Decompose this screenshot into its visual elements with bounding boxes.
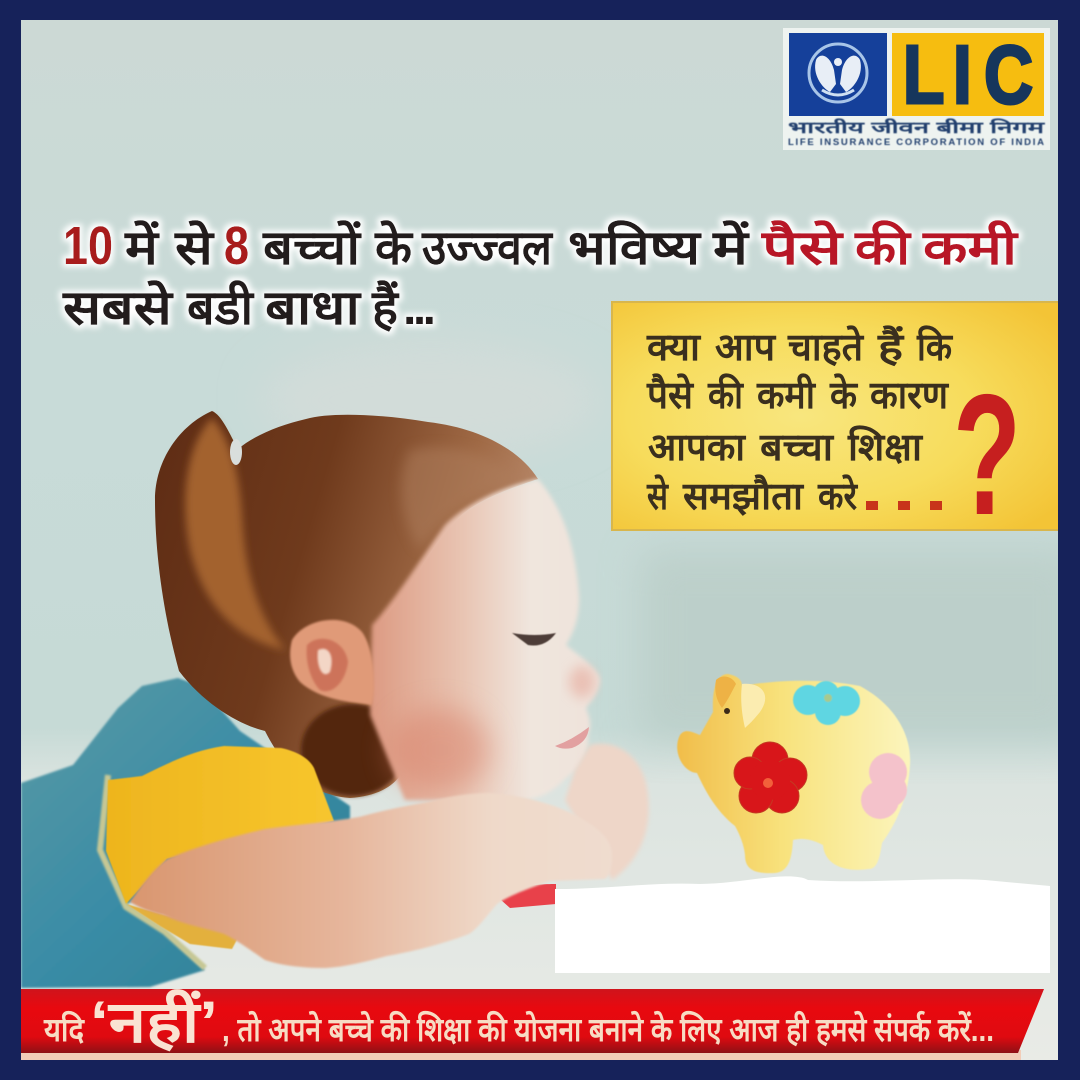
headline: सबसे	[62, 280, 174, 335]
question mark: ?	[953, 359, 1021, 551]
red fabric under hand	[501, 884, 556, 908]
girl lips	[555, 727, 589, 749]
callout: question box: बच्चा	[759, 427, 834, 469]
girl closed eye	[512, 633, 556, 646]
callout: question box: चाहते	[787, 325, 864, 369]
headline: से	[174, 220, 215, 275]
callout: question box: की	[707, 373, 744, 417]
pig red flower	[734, 742, 807, 813]
LIC logo: LIFE INSURANCE CORPORATION OF INDIA	[788, 137, 1044, 148]
pig eye	[724, 708, 730, 714]
headline: भविष्य	[568, 220, 702, 275]
callout: question box: शिक्षा	[847, 425, 923, 469]
callout: question box: कमी	[756, 373, 816, 417]
headline: पैसे	[761, 220, 844, 275]
girl face	[370, 479, 600, 800]
callout: question box: क्या	[646, 327, 701, 369]
headline: बडी	[186, 280, 255, 335]
far arm and hand	[565, 744, 649, 880]
headline: 10	[63, 216, 113, 276]
LIC logo: LIC	[903, 29, 1033, 122]
pig pink flower	[861, 753, 907, 819]
headline: ...	[403, 282, 436, 335]
LIC logo: भारतीय जीवन बीमा निगम	[788, 118, 1046, 137]
callout: question box: आप	[715, 327, 776, 369]
headline: बच्चों	[262, 220, 362, 275]
pig teal flower	[793, 681, 860, 725]
girl ponytail and hair	[155, 411, 538, 798]
callout: question box: समझौता	[682, 474, 804, 518]
white patch	[555, 876, 1050, 973]
callout: question box	[612, 302, 1062, 551]
footer banner	[21, 989, 1044, 1060]
headline: में	[124, 220, 161, 275]
callout: question box: करे	[817, 474, 858, 518]
headline: हैं	[371, 280, 400, 335]
girl arms	[130, 793, 612, 968]
callout: question box: के	[829, 373, 859, 417]
headline: के	[374, 220, 414, 275]
headline: कमी	[922, 220, 1019, 275]
LIC logo	[783, 28, 1050, 150]
headline: उज्ज्वल	[421, 222, 553, 275]
footer banner: ‘नहीं’	[90, 989, 218, 1055]
footer banner: यदि	[43, 1010, 85, 1048]
headline: की	[854, 220, 912, 275]
callout: question box: कारण	[869, 375, 949, 417]
illustration: piggy bank	[677, 674, 910, 873]
headline: में	[712, 220, 751, 275]
callout: question box: कि	[916, 325, 954, 369]
callout: question box: पैसे	[646, 373, 694, 417]
girl denim dress	[21, 678, 350, 988]
pig ear	[741, 684, 765, 728]
headline	[62, 216, 1019, 335]
callout: question box: हैं	[877, 325, 905, 369]
callout: question box: से	[646, 474, 669, 518]
red dots	[866, 501, 942, 510]
girl yellow sleeve	[106, 746, 334, 904]
callout: question box: आपका	[648, 427, 746, 469]
illustration: girl resting on arms	[21, 411, 649, 988]
headline: बाधा	[264, 282, 362, 335]
sleeve under arm	[126, 904, 240, 949]
denim cuff stitching	[100, 775, 205, 968]
headline: 8	[224, 216, 249, 276]
girl ear	[290, 620, 374, 705]
